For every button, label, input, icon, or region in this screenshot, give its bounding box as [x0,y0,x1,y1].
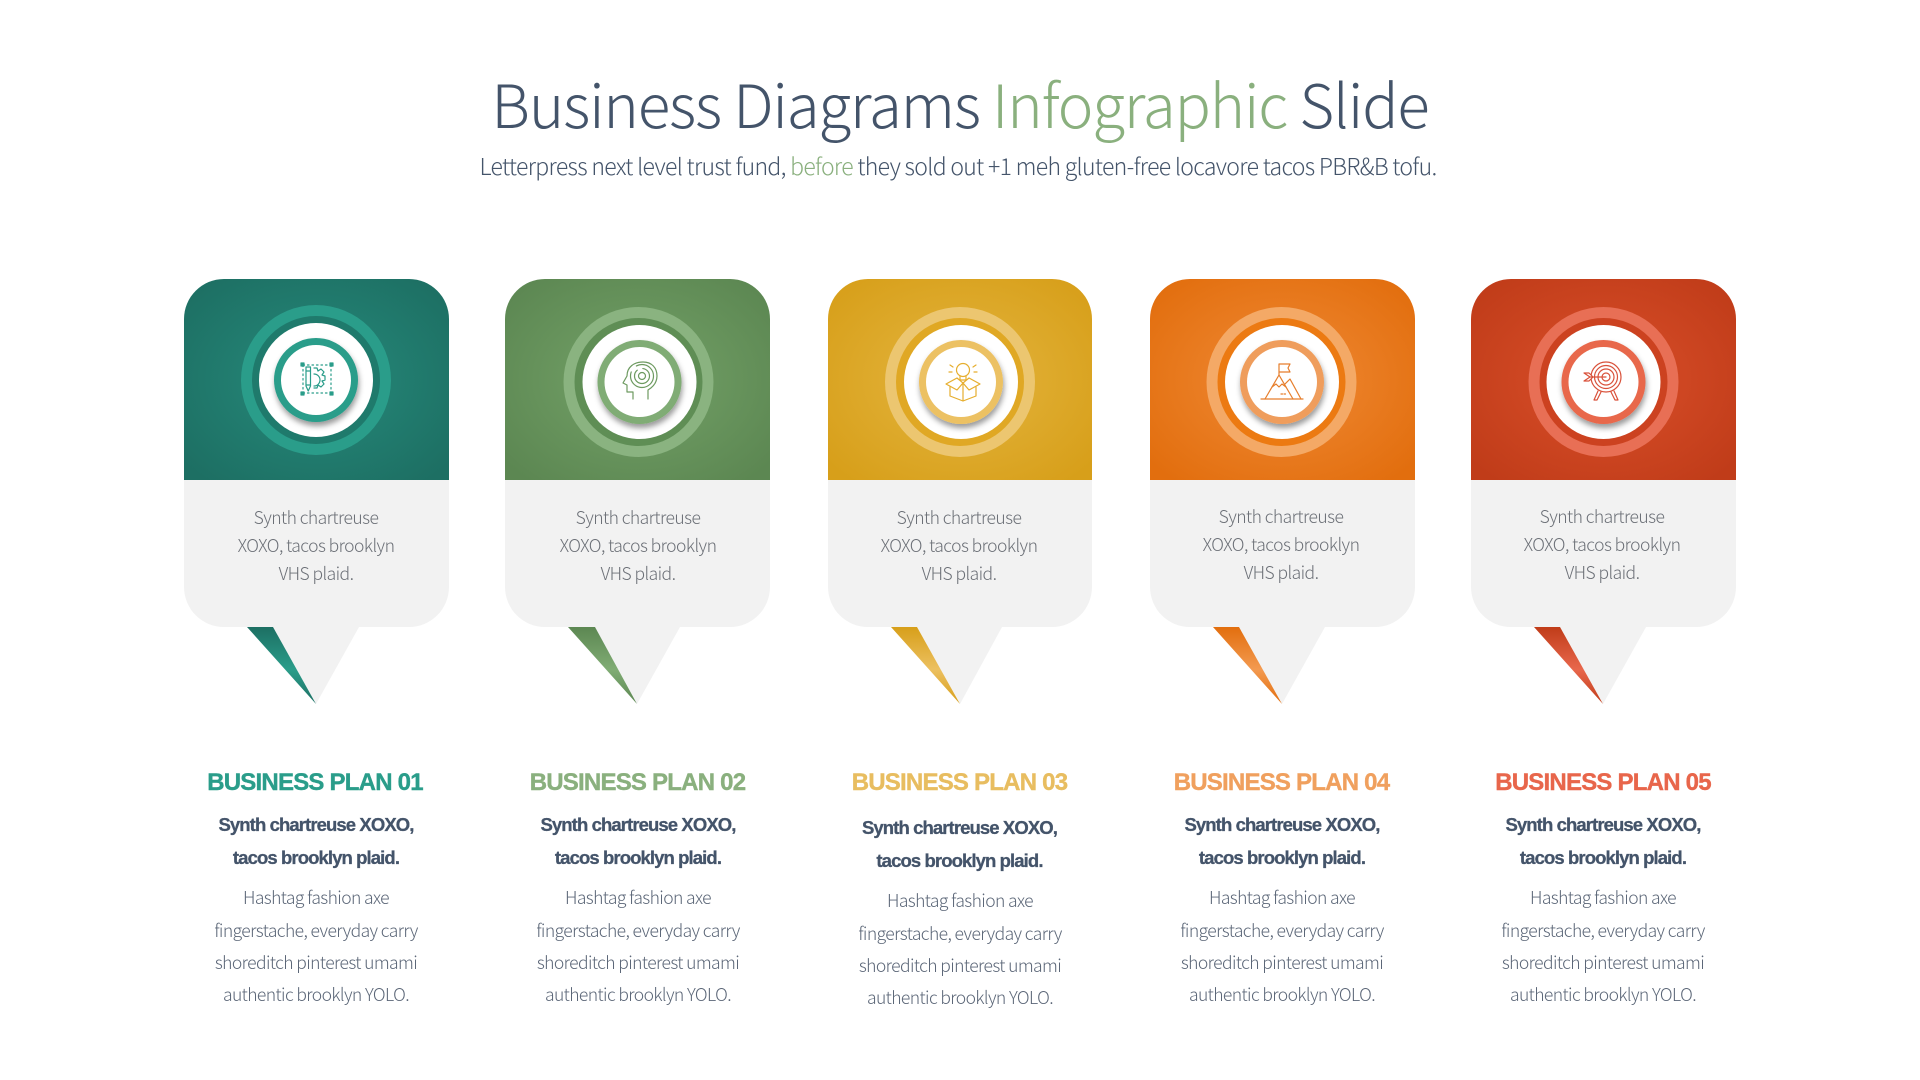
card text: Synth chartreuse [1540,504,1665,529]
pointer accent [568,627,637,704]
bold text: Synth chartreuse XOXO, [218,814,414,835]
card body [1150,480,1415,627]
pointer [917,627,1002,704]
body text: Hashtag fashion axe [1530,885,1676,910]
card text: Synth chartreuse [897,505,1022,530]
body text: fingerstache, everyday carry [536,918,741,943]
card header [1150,279,1415,480]
body text: authentic brooklyn YOLO. [867,985,1053,1010]
body text: authentic brooklyn YOLO. [545,982,731,1007]
body text [1180,885,1385,1007]
panel: business plan 02 [505,279,770,1007]
bold text [540,814,736,868]
icon badge [241,305,391,455]
body text: authentic brooklyn YOLO. [223,982,409,1007]
body text: fingerstache, everyday carry [858,921,1063,946]
card body [505,480,770,627]
pointer accent [1534,627,1603,704]
icon: target with arrow [1584,362,1621,400]
body text [1501,885,1706,1007]
pointer [595,627,680,704]
icon badge [1528,307,1678,457]
body text: fingerstache, everyday carry [1180,918,1385,943]
body text: shoreditch pinterest umami [537,950,739,975]
bold text: tacos brooklyn plaid. [1520,847,1686,868]
bold text: tacos brooklyn plaid. [876,850,1043,871]
pointer [1560,627,1646,704]
pointer accent [891,627,960,704]
body text: Hashtag fashion axe [565,885,711,910]
heading: BUSINESS PLAN 04 [1174,769,1391,796]
body text [536,885,741,1007]
icon badge [564,307,714,457]
panel: business plan 05 [1471,279,1736,1007]
body text: shoreditch pinterest umami [1181,950,1383,975]
card header [1471,279,1736,480]
body text: Hashtag fashion axe [887,888,1033,913]
panel: business plan 03 [828,279,1092,1010]
pointer accent [1213,627,1282,704]
panel: business plan 01: VHS plaid. [279,561,354,586]
card header [828,279,1092,480]
body text: shoreditch pinterest umami [859,953,1061,978]
pointer accent [247,627,316,704]
card body [1471,480,1736,627]
bold text: Synth chartreuse XOXO, [1505,814,1701,835]
panel: business plan 05: XOXO, tacos brooklyn [1524,532,1680,557]
bold text: tacos brooklyn plaid. [555,847,721,868]
heading: BUSINESS PLAN 01 [207,769,423,796]
bold text [1184,814,1380,868]
body text: shoreditch pinterest umami [215,950,417,975]
panel: business plan 02: XOXO, tacos brooklyn [560,533,716,558]
bold text: Synth chartreuse XOXO, [540,814,736,835]
icon badge [1206,307,1356,457]
body text [858,888,1063,1010]
icon: design pencil and gear [301,363,333,395]
bold text [218,814,414,868]
card text: Synth chartreuse [254,505,379,530]
card text: Synth chartreuse [576,505,701,530]
body text: authentic brooklyn YOLO. [1189,982,1375,1007]
icon badge [885,307,1035,457]
card text: Synth chartreuse [1219,504,1344,529]
icon: mountain with flag [1261,364,1303,399]
panel: business plan 04 [1150,279,1415,1007]
bold text [862,817,1057,871]
panel: business plan 03: XOXO, tacos brooklyn [881,533,1037,558]
panel: business plan 01 [184,279,449,1007]
bold text [1505,814,1701,868]
icon: box with light bulb [946,364,980,401]
pointer [1239,627,1325,704]
bold text: tacos brooklyn plaid. [1199,847,1365,868]
pointer [273,627,359,704]
bold text: tacos brooklyn plaid. [233,847,399,868]
panel: business plan 01: XOXO, tacos brooklyn [238,533,394,558]
body text: Hashtag fashion axe [243,885,389,910]
bold text: Synth chartreuse XOXO, [1184,814,1380,835]
heading: BUSINESS PLAN 02 [530,769,746,796]
body text [214,885,419,1007]
body text: authentic brooklyn YOLO. [1510,982,1696,1007]
icon: head with maze [623,362,657,399]
panel: business plan 05: VHS plaid. [1565,560,1640,585]
card body [184,480,449,627]
card header [505,279,770,480]
body text: Hashtag fashion axe [1209,885,1355,910]
body text: fingerstache, everyday carry [214,918,419,943]
card header [184,279,449,480]
body text: fingerstache, everyday carry [1501,918,1706,943]
card body [828,480,1092,627]
title: Business Diagrams Infographic Slide [491,59,1429,146]
heading: BUSINESS PLAN 03 [852,769,1068,796]
subtitle: Letterpress next level trust fund, before they sold out +1 meh gluten-free locavore tacos PBR&B tofu. [479,148,1437,182]
bold text: Synth chartreuse XOXO, [862,817,1057,838]
body text: shoreditch pinterest umami [1502,950,1704,975]
panel: business plan 04: XOXO, tacos brooklyn [1203,532,1359,557]
panel: business plan 02: VHS plaid. [601,561,676,586]
heading: BUSINESS PLAN 05 [1495,769,1711,796]
panel: business plan 03: VHS plaid. [922,561,997,586]
panel: business plan 04: VHS plaid. [1244,560,1319,585]
